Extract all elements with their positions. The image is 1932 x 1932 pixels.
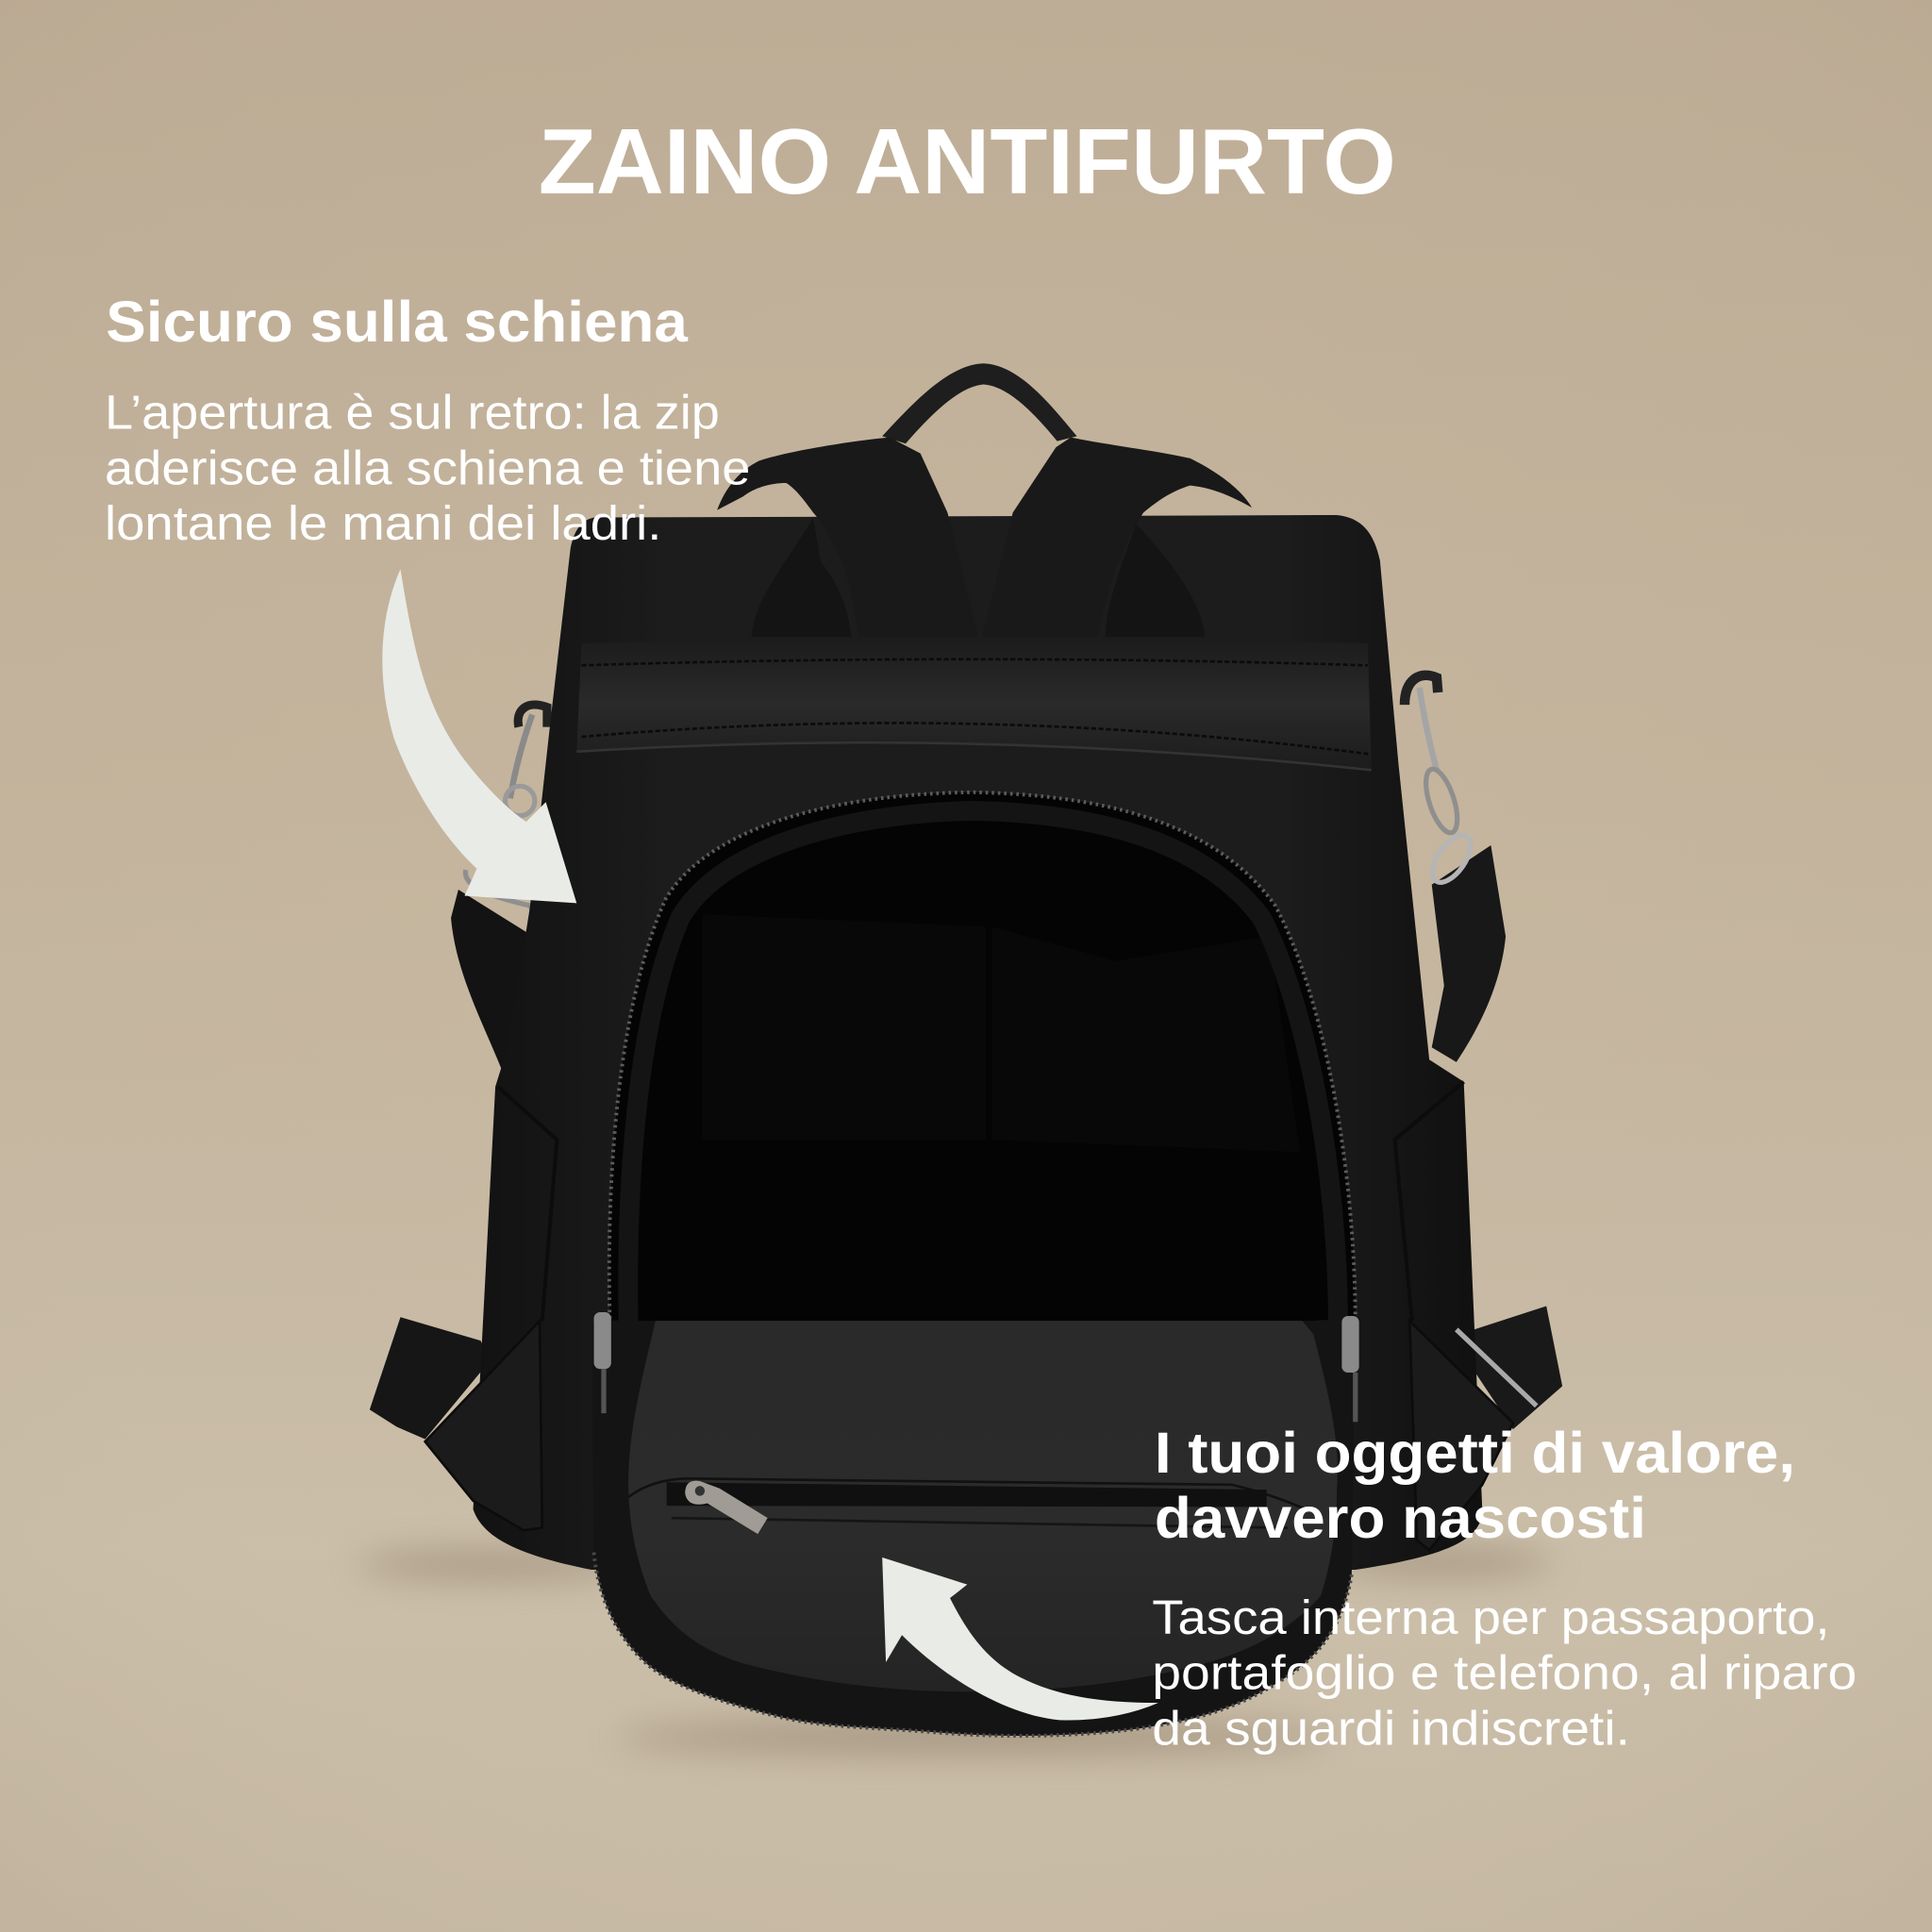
heading: I tuoi oggetti di valore, davvero nascosti bbox=[1155, 1421, 1795, 1551]
text block: I tuoi oggetti di valore bbox=[1152, 1421, 1857, 1755]
right side strap and hardware bbox=[1405, 675, 1506, 1062]
body text: rear opening: lontane le mani dei ladri. bbox=[105, 496, 661, 550]
text block: Sicuro sulla schiena bbox=[105, 290, 750, 550]
right shoulder strap bbox=[982, 438, 1252, 637]
body text: hidden inner pocket: portafoglio e telefono, al riparo bbox=[1152, 1646, 1857, 1700]
title: ZAINO ANTIFURTO bbox=[539, 109, 1396, 213]
body text: hidden inner pocket bbox=[1152, 1591, 1857, 1755]
arrow: pointing to rear zip bbox=[382, 569, 576, 903]
body text: rear opening: L’apertura è sul retro: la zip bbox=[105, 386, 720, 440]
lower right tab bbox=[1452, 1306, 1562, 1429]
zipper pulls at flap hinge bbox=[594, 1312, 1359, 1422]
main body bbox=[474, 515, 1482, 1570]
left shoulder strap bbox=[717, 438, 978, 637]
body text: hidden inner pocket: da sguardi indiscreti. bbox=[1152, 1701, 1630, 1755]
main zipper bbox=[609, 792, 1356, 1324]
body text: rear opening bbox=[105, 386, 750, 550]
floor shadow bbox=[358, 1550, 1553, 1752]
heading: I tuoi oggetti di valore, davvero nascosti: I tuoi oggetti di valore, bbox=[1155, 1421, 1795, 1486]
heading: I tuoi oggetti di valore, davvero nascosti: davvero nascosti bbox=[1155, 1486, 1646, 1551]
right tab buckle bbox=[1457, 1329, 1537, 1406]
body text: hidden inner pocket: Tasca interna per passaporto, bbox=[1152, 1591, 1830, 1644]
arrow: pointing to inner pocket bbox=[882, 1557, 1158, 1721]
interior pockets bbox=[702, 914, 1300, 1152]
left side strap and hardware bbox=[451, 705, 547, 1072]
leather band with stitching bbox=[576, 639, 1372, 770]
side pockets bbox=[498, 1082, 1464, 1321]
body text: rear opening: aderisce alla schiena e tiene bbox=[105, 441, 750, 494]
lower corner panels bbox=[425, 1321, 1513, 1550]
lower left tab bbox=[370, 1317, 491, 1440]
backpack photo bbox=[358, 363, 1562, 1752]
open main compartment bbox=[609, 792, 1356, 1324]
top handle bbox=[882, 363, 1077, 443]
flap pocket zipper bbox=[628, 1478, 1306, 1534]
heading: Sicuro sulla schiena: Sicuro sulla schiena bbox=[106, 290, 689, 355]
open front flap bbox=[591, 1320, 1356, 1736]
